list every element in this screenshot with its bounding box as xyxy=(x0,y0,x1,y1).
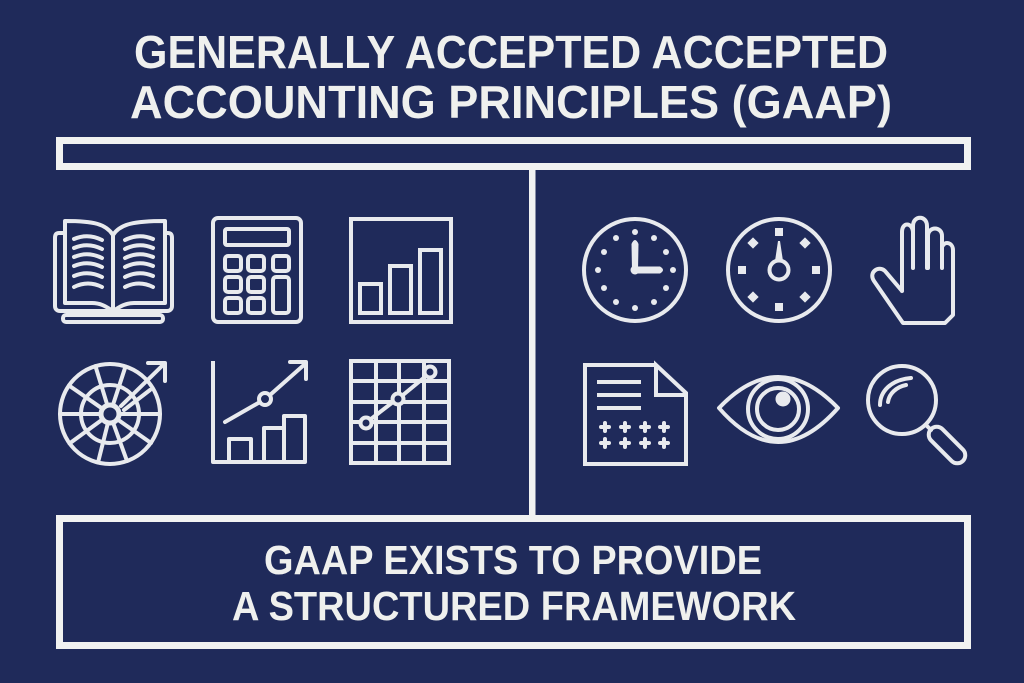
icon: grid with trend line xyxy=(351,361,449,463)
icon: line and bar chart xyxy=(213,361,306,462)
icon: magnifying glass xyxy=(868,366,969,467)
icon: dial gauge xyxy=(728,219,830,321)
icon: bar chart in frame xyxy=(351,219,451,322)
header bar xyxy=(60,140,968,166)
icon: raised hand xyxy=(872,218,953,323)
title: GENERALLY ACCEPTED ACCEPTED xyxy=(134,26,888,78)
icon: eye xyxy=(719,377,838,442)
footer text: A STRUCTURED FRAMEWORK xyxy=(232,583,796,629)
panel: left icons xyxy=(55,218,451,464)
icon: open book xyxy=(55,221,172,322)
panel: right icons xyxy=(584,218,969,467)
icon: clock xyxy=(584,219,686,321)
footer box xyxy=(60,518,968,646)
icon: target with arrow xyxy=(60,363,165,464)
footer text: GAAP EXISTS TO PROVIDE xyxy=(264,537,762,583)
footer text xyxy=(232,537,796,629)
title: ACCOUNTING PRINCIPLES (GAAP) xyxy=(130,76,892,128)
center divider xyxy=(529,167,536,517)
icon: calculator xyxy=(213,218,301,322)
icon: document xyxy=(585,365,686,464)
title xyxy=(130,26,892,128)
